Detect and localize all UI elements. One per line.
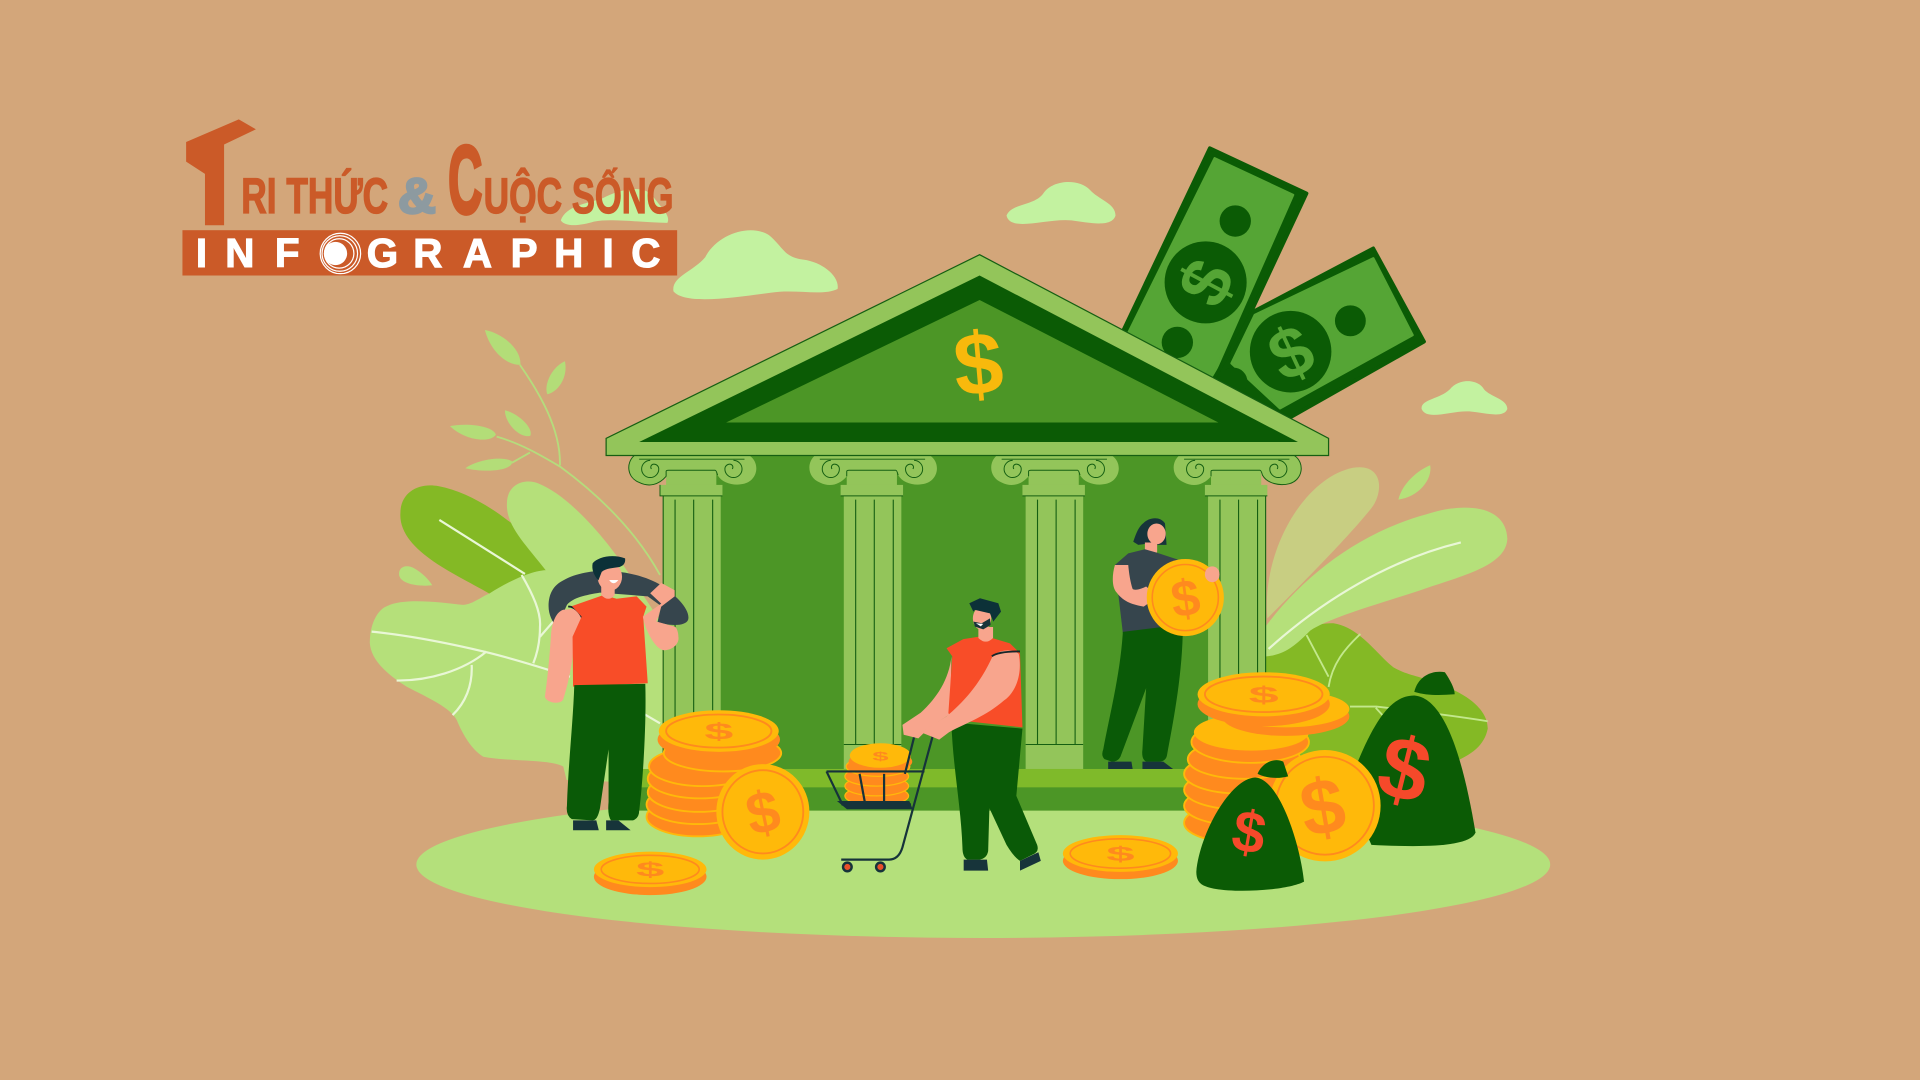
small leaf xyxy=(399,566,432,586)
bank building xyxy=(606,255,1329,811)
wordmark: SỐNG xyxy=(572,167,673,224)
coin: flat right: $ xyxy=(1106,843,1135,866)
logo O mark xyxy=(320,233,361,274)
coin stack: right: $ xyxy=(1249,682,1279,708)
pediment xyxy=(606,255,1329,456)
basket coins: $ xyxy=(872,750,889,763)
man carrying sack xyxy=(545,556,688,830)
coin: large left xyxy=(716,764,809,860)
coin: flat right xyxy=(1063,835,1178,879)
basket coins xyxy=(845,743,912,806)
man pushing cart xyxy=(902,598,1041,871)
clouds xyxy=(561,182,1507,415)
raised arm xyxy=(643,583,679,650)
money bag: small: $ xyxy=(1227,798,1271,868)
shoes xyxy=(573,820,631,830)
large pale leaf xyxy=(370,570,662,784)
coin: large left: $ xyxy=(740,778,786,848)
band text xyxy=(196,230,660,276)
wordmark: & xyxy=(398,168,436,224)
sack xyxy=(549,571,688,627)
wordmark xyxy=(241,126,673,234)
pants xyxy=(951,722,1038,861)
banknote: left: $ xyxy=(1163,247,1251,319)
shirt xyxy=(1115,549,1178,633)
shoes xyxy=(1108,762,1173,769)
wordmark: C xyxy=(448,126,482,234)
hair xyxy=(1133,518,1167,545)
pants xyxy=(1102,624,1183,762)
pediment: $ xyxy=(950,312,1007,415)
head xyxy=(598,563,622,591)
infographic band xyxy=(182,230,677,276)
sleeve xyxy=(568,607,582,618)
coin: $ xyxy=(1167,567,1204,629)
shirt xyxy=(572,595,648,687)
column 3 xyxy=(991,456,1119,769)
woman holding coin xyxy=(1102,518,1224,769)
near arm xyxy=(921,650,1020,740)
wordmark: RI THỨC xyxy=(241,168,388,224)
coin: large right: $ xyxy=(1294,760,1352,854)
smile xyxy=(976,623,983,626)
logo letter T xyxy=(186,119,256,225)
shopping cart xyxy=(827,735,933,871)
beard xyxy=(973,618,991,629)
neck xyxy=(1145,542,1157,555)
column 1 xyxy=(629,456,756,769)
head xyxy=(973,607,991,630)
smile xyxy=(609,580,618,583)
neck xyxy=(978,627,993,642)
pale leaf xyxy=(1266,508,1507,656)
coin stack: left xyxy=(647,710,781,836)
shoes xyxy=(964,852,1041,871)
column 2 xyxy=(809,456,937,769)
banknote: left xyxy=(1106,148,1307,416)
head xyxy=(1147,523,1166,544)
plants: right xyxy=(1261,465,1507,796)
ground xyxy=(416,791,1550,938)
coin: flat left xyxy=(594,852,707,895)
coin xyxy=(1147,559,1224,636)
coin: large right xyxy=(1269,750,1381,861)
hair xyxy=(969,598,1001,622)
banknote: right: $ xyxy=(1257,309,1326,398)
banknotes xyxy=(1106,148,1424,420)
coin: flat left: $ xyxy=(636,859,665,881)
banknote: right xyxy=(1206,248,1424,420)
branch with small leaves xyxy=(450,330,660,575)
money bag: small xyxy=(1196,760,1304,891)
left arm xyxy=(545,609,582,703)
pale leaf xyxy=(507,482,662,722)
neck xyxy=(601,583,615,599)
shirt xyxy=(947,637,1022,727)
wordmark: UỘC xyxy=(484,167,562,224)
far arm xyxy=(902,656,951,738)
coin stack: left: $ xyxy=(704,719,733,745)
coin stack: right xyxy=(1184,672,1349,842)
sleeve xyxy=(992,651,1020,656)
pants xyxy=(567,684,646,820)
logo: Tri Thức & Cuộc Sống Infographic xyxy=(182,119,677,276)
band text: INF xyxy=(196,230,300,276)
steps xyxy=(628,769,1216,811)
lime leaf xyxy=(400,485,567,594)
column 4 xyxy=(1174,456,1301,769)
money bag: large xyxy=(1347,672,1476,846)
money bag: large: $ xyxy=(1369,715,1440,823)
lime leaf xyxy=(1261,623,1488,796)
hair xyxy=(592,556,625,580)
band text: GRAPHIC xyxy=(367,230,660,276)
wall xyxy=(698,456,1237,769)
hand xyxy=(1205,566,1220,582)
arm xyxy=(1113,565,1158,607)
plants: left xyxy=(370,330,662,784)
